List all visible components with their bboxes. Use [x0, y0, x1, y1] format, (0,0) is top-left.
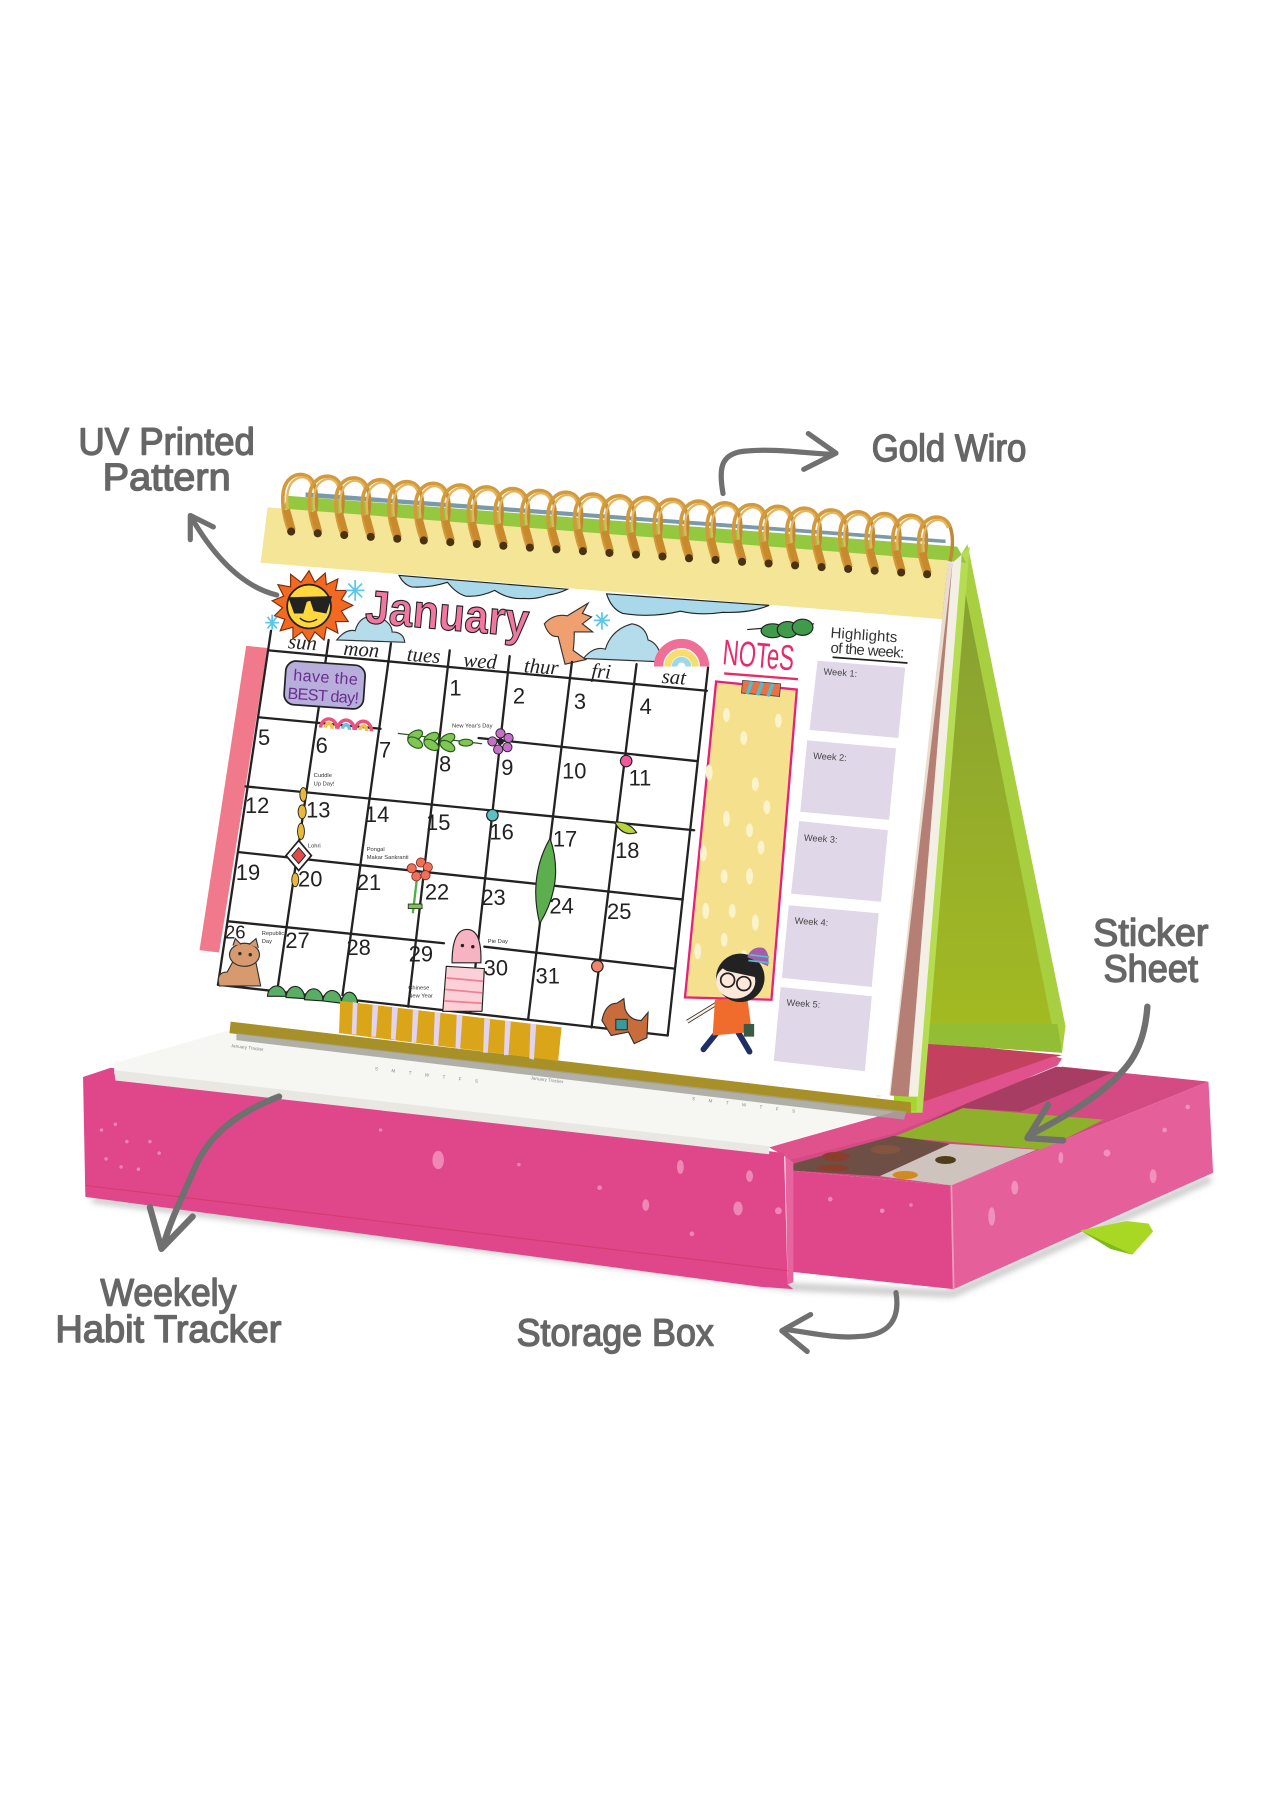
weekday labels: thur — [523, 655, 560, 680]
girl character — [687, 947, 769, 1052]
weekly habit tracker pages: January Tracker — [530, 1075, 564, 1084]
speech bubble: BEST day! — [287, 685, 360, 708]
calendar page — [198, 563, 942, 1097]
holiday captions: Day — [262, 939, 272, 945]
date numbers: 13 — [306, 798, 330, 823]
date numbers: 31 — [536, 964, 560, 989]
lower clouds — [337, 616, 662, 662]
date numbers: 26 — [225, 922, 246, 943]
calendar yellow header band — [261, 507, 948, 619]
label: Storage Box: Storage Box — [517, 1313, 714, 1355]
arrow: storage box — [782, 1293, 897, 1351]
holiday captions: Lohri — [308, 844, 321, 850]
label: Sticker Sheet: Sticker — [1093, 913, 1209, 955]
date numbers: 14 — [365, 802, 389, 827]
week box 4 — [782, 905, 879, 987]
mini rainbows — [321, 719, 371, 731]
week box 3 — [791, 821, 888, 902]
speech bubble: have the — [293, 666, 358, 689]
Notes heading — [721, 632, 798, 679]
holiday captions: Chinese — [408, 985, 429, 991]
date numbers: 6 — [316, 733, 328, 758]
date numbers: 27 — [285, 928, 310, 953]
week box 2 — [800, 740, 896, 820]
date numbers: 11 — [629, 765, 651, 790]
week box 1 — [810, 661, 905, 738]
weekday labels: fri — [591, 660, 612, 684]
drawer front face — [789, 1170, 954, 1289]
beads and diamond ornament — [286, 788, 311, 887]
red flower — [407, 858, 432, 913]
date numbers: 15 — [426, 810, 450, 835]
holiday captions: Pongal — [367, 847, 385, 853]
leaf branch — [398, 728, 482, 754]
date numbers: 20 — [298, 867, 322, 892]
grid dot ornaments — [487, 755, 637, 972]
date numbers: 5 — [258, 725, 270, 750]
highlights heading: of the week: — [830, 640, 905, 662]
rainbow — [658, 643, 705, 666]
label: UV Printed Pattern: UV Printed — [78, 421, 255, 463]
storage box front — [83, 1068, 793, 1289]
date numbers: 3 — [574, 689, 586, 714]
washi tape — [741, 680, 781, 696]
weekly habit tracker pages: January Tracker — [231, 1043, 264, 1052]
date numbers — [225, 675, 652, 989]
holiday captions: Makar Sankranti — [367, 855, 409, 861]
date numbers: 10 — [562, 758, 586, 783]
gold striped tape — [339, 1001, 562, 1061]
gold spiral binding — [283, 474, 952, 578]
sticker sheet — [789, 1136, 1037, 1185]
highlights heading — [830, 625, 908, 663]
sun with sunglasses — [272, 571, 353, 642]
holiday captions: Republic — [262, 931, 284, 937]
bird — [544, 603, 593, 664]
label: Weekely Habit Tracker: Habit Tracker — [55, 1309, 282, 1351]
blue top clouds — [399, 575, 769, 615]
week box 2: Week 2: — [813, 751, 847, 763]
purple flower — [488, 729, 513, 754]
date numbers: 24 — [549, 893, 574, 918]
date numbers: 4 — [640, 694, 652, 719]
date numbers: 1 — [449, 675, 462, 700]
storage box drawer — [92, 1067, 1213, 1294]
date numbers: 23 — [481, 885, 506, 910]
calendar underside edge — [229, 1022, 911, 1120]
week box 1: Week 1: — [823, 667, 857, 679]
holiday captions: Pie Day — [488, 939, 508, 945]
arrow: sticker sheet — [1027, 1007, 1147, 1140]
label: Gold Wiro: Gold Wiro — [872, 428, 1026, 470]
arrow: habit tracker — [150, 1097, 279, 1249]
date numbers: 12 — [245, 793, 269, 818]
weekly habit tracker pages: S M T W T F S — [692, 1096, 795, 1114]
date numbers: 8 — [439, 751, 451, 776]
weekday labels: sat — [661, 666, 688, 690]
arrow: gold wiro — [721, 434, 836, 494]
holiday captions — [262, 724, 508, 999]
pink side strip — [200, 646, 268, 952]
weekday labels: sun — [287, 631, 318, 655]
date numbers: 16 — [489, 819, 514, 844]
holiday captions: New Year's Day — [452, 724, 493, 730]
notes panel — [685, 680, 797, 1000]
weekday labels: tues — [406, 644, 441, 668]
leaf sprig — [747, 619, 814, 638]
date numbers: 18 — [615, 838, 639, 863]
side page stack — [876, 555, 962, 1097]
date numbers: 17 — [553, 826, 577, 851]
label: Weekely Habit Tracker — [55, 1272, 282, 1351]
date numbers: 2 — [513, 683, 525, 708]
easel stand back — [894, 544, 1065, 1113]
date numbers: 29 — [409, 942, 433, 967]
date numbers: 30 — [484, 956, 508, 981]
weekday labels: mon — [343, 638, 380, 662]
date numbers: 22 — [425, 879, 449, 904]
label: UV Printed Pattern — [78, 421, 255, 499]
label: Weekely Habit Tracker: Weekely — [100, 1272, 236, 1314]
speech bubble — [283, 660, 366, 710]
week box 5: Week 5: — [786, 998, 821, 1010]
bushes — [268, 986, 357, 1004]
date numbers: 7 — [379, 738, 391, 763]
holiday captions: Cuddle — [314, 773, 332, 779]
label: UV Printed Pattern: Pattern — [103, 457, 231, 499]
week box 5 — [774, 987, 872, 1071]
highlights heading: Highlights — [830, 625, 898, 646]
storage box lid top — [769, 1041, 1062, 1160]
date numbers: 19 — [236, 860, 260, 885]
arrow: UV pattern — [190, 515, 277, 595]
weekday labels — [287, 631, 688, 690]
date numbers: 9 — [501, 755, 513, 780]
Notes heading: NOTeS — [721, 632, 796, 678]
date numbers: 25 — [607, 899, 631, 924]
blue page edge behind spiral — [306, 492, 946, 543]
weekday labels: wed — [463, 650, 498, 674]
green cover strip behind spiral — [283, 496, 966, 563]
label: Sticker Sheet — [1093, 913, 1209, 990]
drawer right face — [951, 1082, 1213, 1289]
label: Sticker Sheet: Sheet — [1104, 948, 1199, 990]
month title: January — [363, 581, 532, 648]
date numbers: 28 — [346, 935, 371, 960]
long leaf — [536, 838, 556, 924]
date numbers: 21 — [357, 870, 381, 895]
cat — [218, 939, 261, 986]
weekly habit tracker pages: S M T W T F S — [375, 1066, 478, 1084]
week box 4: Week 4: — [794, 916, 829, 928]
weekly habit tracker pages — [114, 1030, 895, 1154]
holiday captions: Up Day! — [314, 781, 335, 787]
snowflakes — [265, 580, 610, 630]
calendar grid — [218, 631, 708, 1035]
week box 3: Week 3: — [804, 833, 838, 845]
ribbon — [1080, 1221, 1153, 1255]
holiday captions: New Year — [408, 993, 433, 999]
dog — [602, 999, 648, 1044]
pie character — [443, 929, 484, 1011]
